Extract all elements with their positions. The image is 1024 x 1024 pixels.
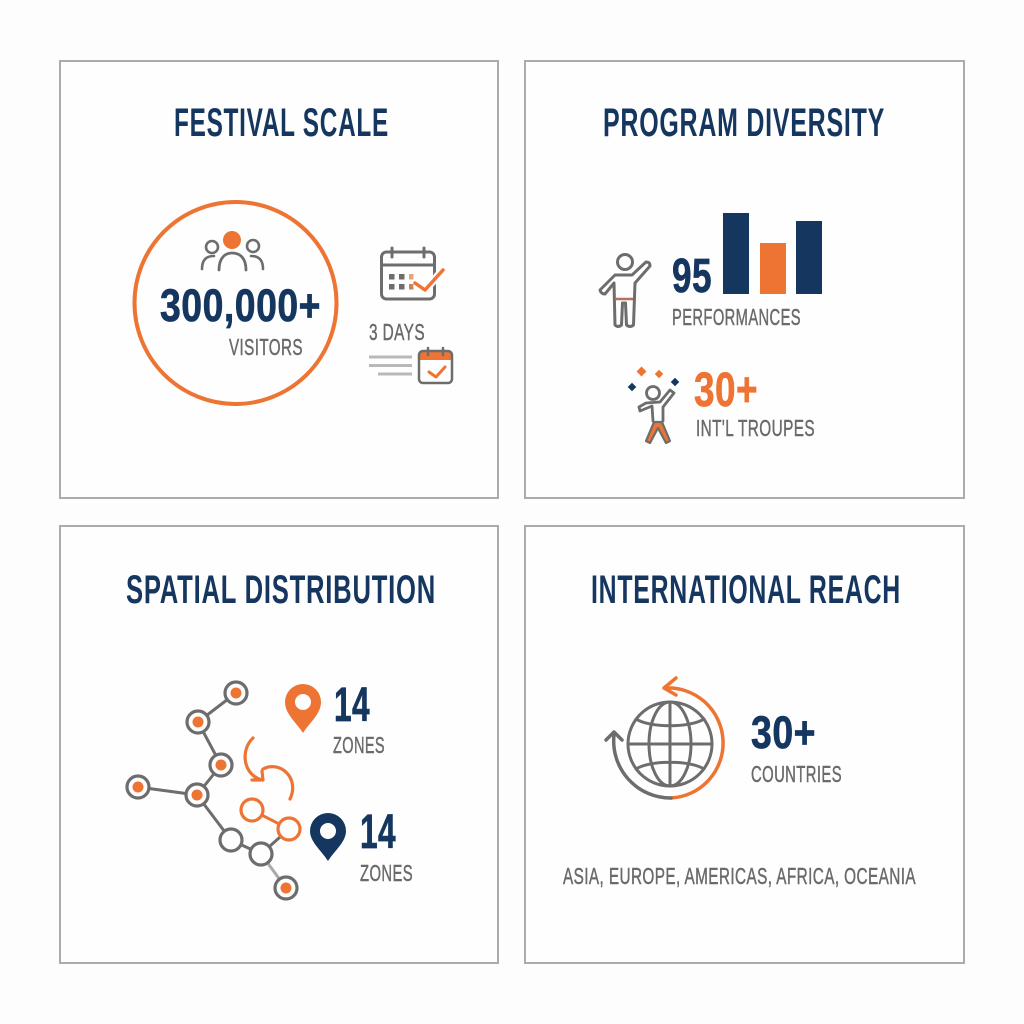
label: countries: COUNTRIES xyxy=(751,761,842,787)
label: zones second: ZONES xyxy=(360,860,413,886)
stat: 95 performances: 95 xyxy=(672,250,712,303)
panel: international reach xyxy=(525,526,964,963)
network map xyxy=(127,682,300,899)
stat: visitors number: 300,000+ xyxy=(160,280,321,331)
heading: festival scale: FESTIVAL SCALE xyxy=(174,101,389,145)
heading: spatial distribution: SPATIAL DISTRIBUTION xyxy=(126,568,436,612)
icon: juggler xyxy=(628,367,679,443)
label: visitors: VISITORS xyxy=(229,334,303,360)
icon: crowd xyxy=(202,231,263,270)
stat: 14 zones: 14 xyxy=(334,679,370,732)
bar chart xyxy=(723,213,822,294)
stat: 30+ troupes: 30+ xyxy=(694,364,758,417)
panel: spatial distribution xyxy=(60,526,498,963)
icon: orange pin xyxy=(285,684,321,733)
stat: 14 zones second: 14 xyxy=(360,806,396,859)
icon: small calendar xyxy=(419,348,452,383)
icon: performer xyxy=(600,254,650,326)
panel: festival scale xyxy=(60,61,498,498)
label: 3 days: 3 DAYS xyxy=(369,319,425,345)
panel: program diversity xyxy=(525,61,964,498)
icon: navy pin xyxy=(310,813,346,861)
stat: 30+ countries: 30+ xyxy=(751,707,816,758)
label: performances: PERFORMANCES xyxy=(672,304,801,330)
icon: schedule lines xyxy=(369,357,412,374)
label: zones: ZONES xyxy=(333,732,385,758)
visitors circle xyxy=(134,202,336,404)
icon: calendar with check xyxy=(382,248,443,299)
icon: globe with arrows xyxy=(606,678,723,798)
label: international troupes: INT'L TROUPES xyxy=(696,415,815,441)
